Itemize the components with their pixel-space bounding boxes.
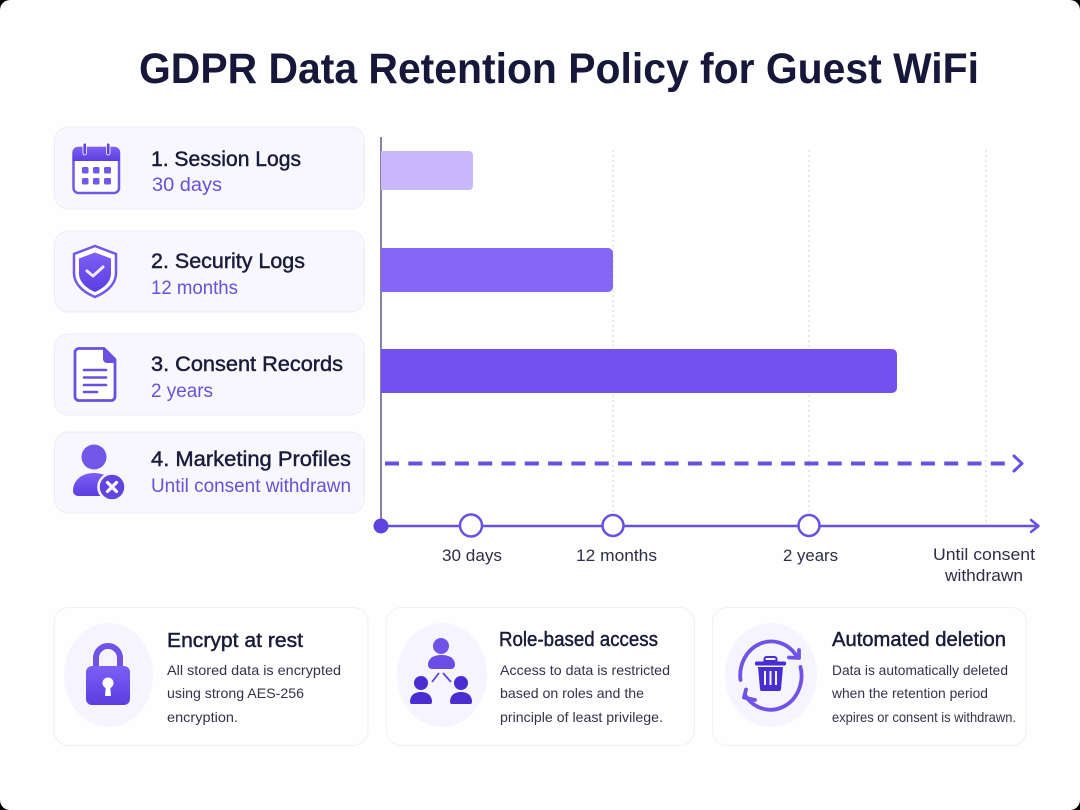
label: consent records: 3. Consent Records xyxy=(151,353,343,376)
value: 2 years: 2 years xyxy=(151,381,213,402)
value: 30 days: 30 days xyxy=(152,175,222,196)
icon: role hierarchy xyxy=(397,623,487,727)
description: encrypt at rest xyxy=(167,662,341,725)
time axis xyxy=(374,514,1038,536)
bar: consent records xyxy=(381,349,897,393)
value: until consent withdrawn: Until consent withdrawn xyxy=(151,476,351,497)
panel: automated deletion xyxy=(712,608,1026,746)
bar: session logs xyxy=(381,151,473,190)
icon: recycle bin xyxy=(725,623,817,727)
label: marketing profiles: 4. Marketing Profiles xyxy=(151,448,351,471)
icon: user removed xyxy=(73,444,126,500)
axis label: until consent withdrawn: withdrawn xyxy=(944,567,1023,585)
value: 12 months: 12 months xyxy=(151,278,238,299)
axis label: until consent withdrawn xyxy=(933,546,1035,585)
panel: security logs xyxy=(54,231,364,312)
icon: document xyxy=(75,348,116,400)
description: automated deletion xyxy=(831,662,1016,725)
icon: padlock xyxy=(64,623,153,727)
vertical axis xyxy=(380,137,382,526)
label: security logs: 2. Security Logs xyxy=(151,250,305,273)
description: role-based access xyxy=(500,662,670,725)
description: role-based access: principle of least privilege. xyxy=(500,709,663,725)
heading: encrypt at rest: Encrypt at rest xyxy=(167,630,303,652)
heading: role-based access: Role-based access xyxy=(499,629,658,651)
bar: security logs xyxy=(381,248,613,292)
axis label: 12 months: 12 months xyxy=(576,547,657,565)
description: role-based access: Access to data is restricted xyxy=(500,662,670,678)
description: automated deletion: expires or consent is withdrawn. xyxy=(832,709,1016,725)
description: role-based access: based on roles and the xyxy=(500,685,644,701)
panel: encrypt at rest xyxy=(54,608,368,746)
heading: automated deletion: Automated deletion xyxy=(832,629,1006,651)
panel: session logs xyxy=(54,127,364,209)
panel: consent records xyxy=(54,334,364,415)
arrow: marketing profiles dashed xyxy=(385,456,1022,471)
axis label: 30 days: 30 days xyxy=(442,547,502,565)
axis label: until consent withdrawn: Until consent xyxy=(933,546,1035,564)
icon: calendar xyxy=(72,143,120,193)
panel: marketing profiles xyxy=(54,432,364,513)
label: session logs: 1. Session Logs xyxy=(151,148,301,171)
chart: retention timeline xyxy=(374,137,1038,585)
icon: shield xyxy=(74,246,116,297)
axis label: 2 years: 2 years xyxy=(783,547,838,565)
title: GDPR Data Retention Policy for Guest WiFi xyxy=(139,45,979,93)
description: encrypt at rest: using strong AES-256 xyxy=(167,685,304,701)
description: encrypt at rest: All stored data is encrypted xyxy=(167,662,341,678)
panel: role-based access xyxy=(386,608,694,746)
description: encrypt at rest: encryption. xyxy=(167,709,238,725)
description: automated deletion: Data is automatically deleted xyxy=(832,662,1008,678)
description: automated deletion: when the retention period xyxy=(831,685,988,701)
